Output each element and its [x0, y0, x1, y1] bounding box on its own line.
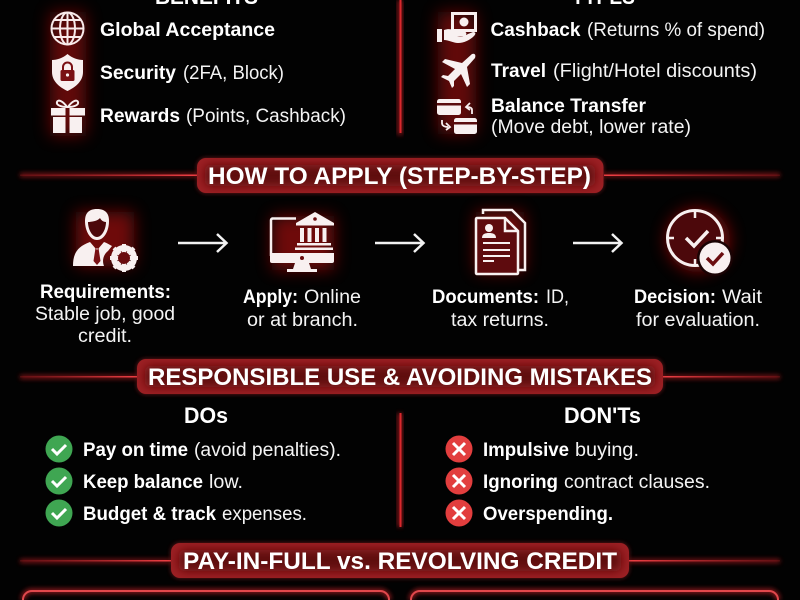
text: cashback: Cashback — [490, 20, 581, 41]
text: rewards: (Points, Cashback) — [186, 106, 346, 127]
arrow — [375, 234, 424, 252]
item: pay on time: (avoid penalties). — [194, 440, 341, 461]
icon: monitor with bank — [270, 212, 334, 272]
heading: pay-in-full vs revolving: PAY-IN-FULL vs. REVOLVING CREDIT — [183, 548, 617, 575]
panel: pay-in-full (cropped) — [23, 591, 389, 600]
step: decision — [634, 208, 763, 331]
text: apply: Online — [304, 287, 361, 308]
icon: globe — [50, 12, 86, 136]
item: ignoring — [483, 472, 710, 493]
text: global acceptance: Global Acceptance — [100, 20, 275, 41]
panel: benefits — [50, 0, 346, 136]
vertical divider: top — [397, 0, 403, 135]
text: cashback — [490, 20, 765, 41]
vertical divider: responsibilities — [397, 413, 403, 527]
heading: how to apply — [20, 158, 780, 193]
step: documents — [432, 210, 569, 331]
item: impulsive: Impulsive — [483, 440, 569, 461]
icon: cross — [446, 468, 472, 494]
panel: dos — [46, 403, 341, 526]
item: pay on time: Pay on time — [83, 440, 188, 461]
item: keep balance: low. — [209, 472, 243, 493]
heading: donts: DON'Ts — [564, 403, 641, 428]
icon: clock with check — [666, 208, 733, 276]
text: rewards: Rewards — [100, 106, 180, 127]
item: budget: Budget & track — [83, 504, 216, 525]
text: balance transfer — [491, 96, 691, 138]
arrow — [573, 234, 622, 252]
text: documents — [432, 287, 569, 331]
icon: balance transfer cards — [437, 99, 477, 134]
icon: check — [46, 436, 72, 462]
icon: gift — [51, 101, 85, 133]
heading: responsible use: RESPONSIBLE USE & AVOIDING MISTAKES — [148, 364, 652, 391]
text: rewards — [100, 106, 346, 127]
text: requirements: Requirements: — [40, 282, 171, 303]
text: apply — [243, 287, 361, 331]
icon: cross — [446, 500, 472, 526]
text: requirements: credit. — [78, 326, 132, 347]
item: impulsive: buying. — [575, 440, 639, 461]
panel: donts — [446, 403, 710, 526]
step: requirements — [35, 209, 175, 347]
icon: shield with lock — [52, 54, 83, 91]
text: security: Security — [100, 63, 176, 84]
heading: pay-in-full vs revolving — [20, 543, 780, 578]
text: requirements — [35, 282, 175, 347]
text: decision: Decision: — [634, 287, 716, 308]
text: documents: Documents: — [432, 287, 539, 308]
icon: cashback hand — [437, 12, 477, 134]
arrow — [178, 234, 226, 252]
icon: check — [46, 468, 72, 494]
text: travel: (Flight/Hotel discounts) — [553, 61, 757, 82]
item: impulsive — [483, 440, 639, 461]
text: decision: Wait — [722, 287, 763, 308]
icon: airplane — [441, 54, 475, 88]
panel: types — [437, 0, 765, 138]
item: ignoring: Ignoring — [483, 472, 558, 493]
item: pay on time — [83, 440, 341, 461]
item: overspending: Overspending. — [483, 504, 613, 525]
text: decision: for evaluation. — [636, 310, 760, 331]
text: requirements: Stable job, good — [35, 304, 175, 325]
panel: revolving credit (cropped) — [411, 591, 778, 600]
icon: check — [46, 500, 72, 526]
text: security — [100, 63, 284, 84]
text: security: (2FA, Block) — [183, 63, 284, 84]
item: budget: expenses. — [222, 504, 307, 525]
step: apply — [243, 212, 361, 331]
text: apply: Apply: — [243, 287, 298, 308]
heading: how to apply: HOW TO APPLY (STEP-BY-STEP) — [208, 163, 591, 190]
item: keep balance: Keep balance — [83, 472, 203, 493]
heading: responsible use — [20, 359, 780, 394]
text: apply: or at branch. — [247, 310, 358, 331]
icon: cross — [446, 436, 472, 462]
text: decision — [634, 287, 763, 331]
text: documents: ID, — [546, 287, 569, 308]
text: documents: tax returns. — [451, 310, 549, 331]
item: ignoring: contract clauses. — [564, 472, 710, 493]
icon: documents — [476, 210, 525, 274]
text: travel: Travel — [491, 61, 546, 82]
text: cashback: (Returns % of spend) — [587, 20, 765, 41]
icon: person with gear — [73, 209, 138, 272]
text: balance transfer: (Move debt, lower rate) — [491, 117, 691, 138]
text: balance transfer: Balance Transfer — [491, 96, 647, 117]
heading: dos: DOs — [184, 403, 228, 428]
item: budget — [83, 504, 307, 525]
